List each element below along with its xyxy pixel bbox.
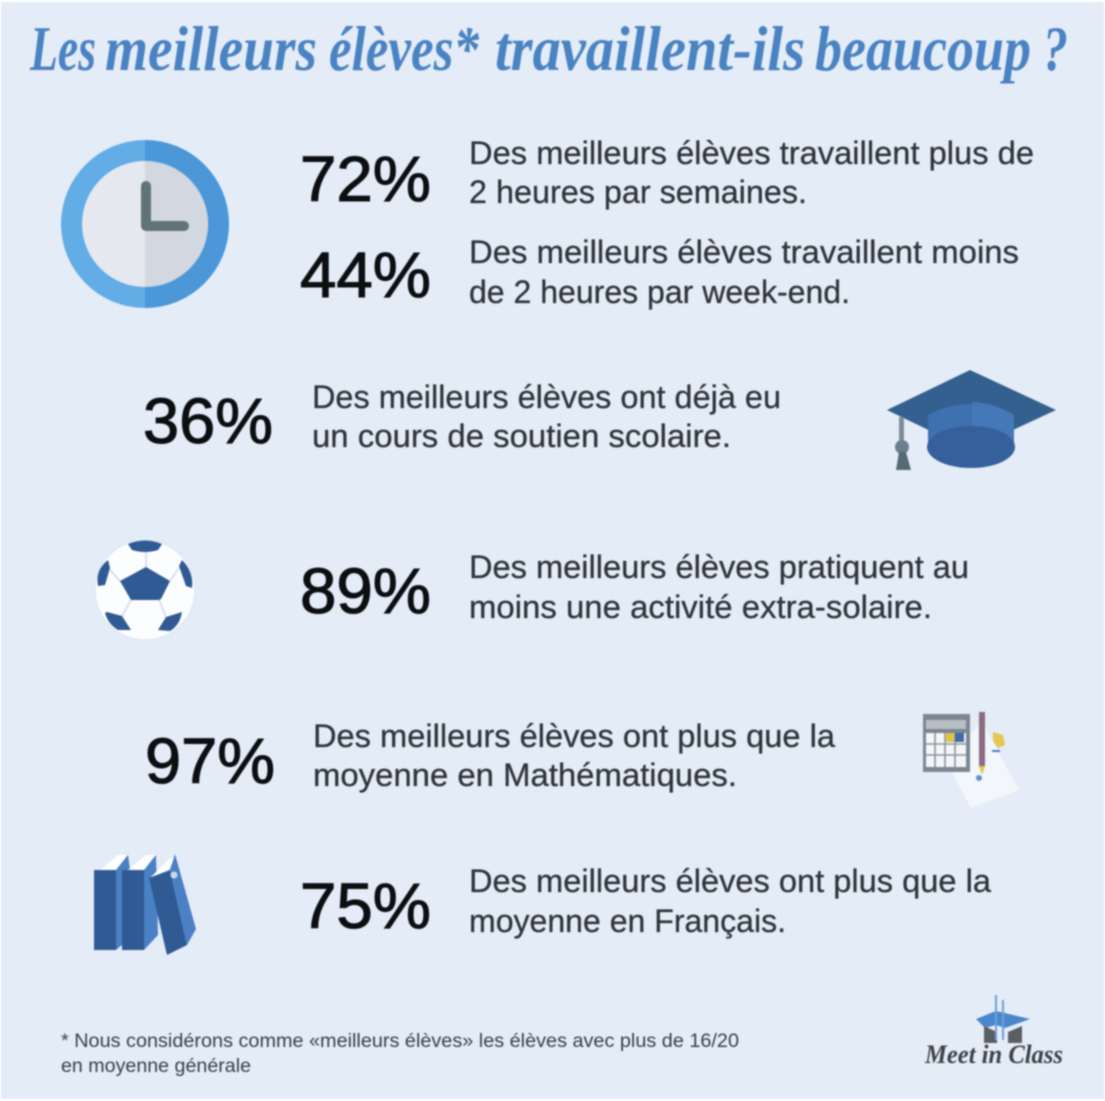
stat: 36%: un cours de soutien scolaire. xyxy=(312,418,731,454)
stat: 72%: 2 heures par semaines. xyxy=(469,174,807,210)
title xyxy=(29,14,1068,84)
stat: 72%: Des meilleurs élèves travaillent plus de xyxy=(469,135,1034,171)
logo: Meet in Class: Meet in Class xyxy=(924,1040,1063,1069)
stat: 97%: moyenne en Mathématiques. xyxy=(313,757,737,793)
icon: soccer ball xyxy=(95,540,195,640)
title: ? xyxy=(1043,14,1068,84)
title: élèves* xyxy=(329,14,479,84)
icon: clock xyxy=(61,140,229,308)
stat: 72% xyxy=(300,135,1034,215)
stat: 97%: 97% xyxy=(145,725,275,797)
stat: 36%: 36% xyxy=(143,385,273,457)
stat: 97% xyxy=(145,718,835,797)
stat: 44%: 44% xyxy=(300,239,431,311)
logo: Meet in Class xyxy=(924,995,1063,1069)
footnote: en moyenne générale xyxy=(61,1056,251,1077)
stat: 75%: 75% xyxy=(300,870,431,942)
title: Les xyxy=(29,14,96,84)
footnote: * Nous considérons comme «meilleurs élèves» les élèves avec plus de 16/20 xyxy=(61,1031,739,1052)
stat: 89% xyxy=(300,549,969,627)
icon: graduation cap xyxy=(887,370,1056,470)
icon: books xyxy=(94,854,196,955)
stat: 36% xyxy=(143,379,781,457)
stat: 89%: Des meilleurs élèves pratiquent au xyxy=(469,549,969,585)
stat: 89%: moins une activité extra-solaire. xyxy=(469,589,932,625)
stat: 75%: Des meilleurs élèves ont plus que la xyxy=(469,863,991,899)
stat: 75% xyxy=(300,863,991,942)
icon: calculator, pencil and paper xyxy=(923,712,1019,808)
stat: 75%: moyenne en Français. xyxy=(469,903,786,939)
title: meilleurs xyxy=(105,14,317,84)
footnote xyxy=(61,1031,739,1077)
stat: 44%: de 2 heures par week-end. xyxy=(469,274,850,310)
stat: 97%: Des meilleurs élèves ont plus que la xyxy=(313,718,835,754)
title: beaucoup xyxy=(815,14,1031,84)
stat: 72%: 72% xyxy=(300,143,431,215)
title: travaillent-ils xyxy=(495,14,805,84)
stat: 89%: 89% xyxy=(300,555,431,627)
stat: 44% xyxy=(300,234,1019,311)
stat: 44%: Des meilleurs élèves travaillent moins xyxy=(469,234,1019,270)
stat: 36%: Des meilleurs élèves ont déjà eu xyxy=(312,379,781,415)
